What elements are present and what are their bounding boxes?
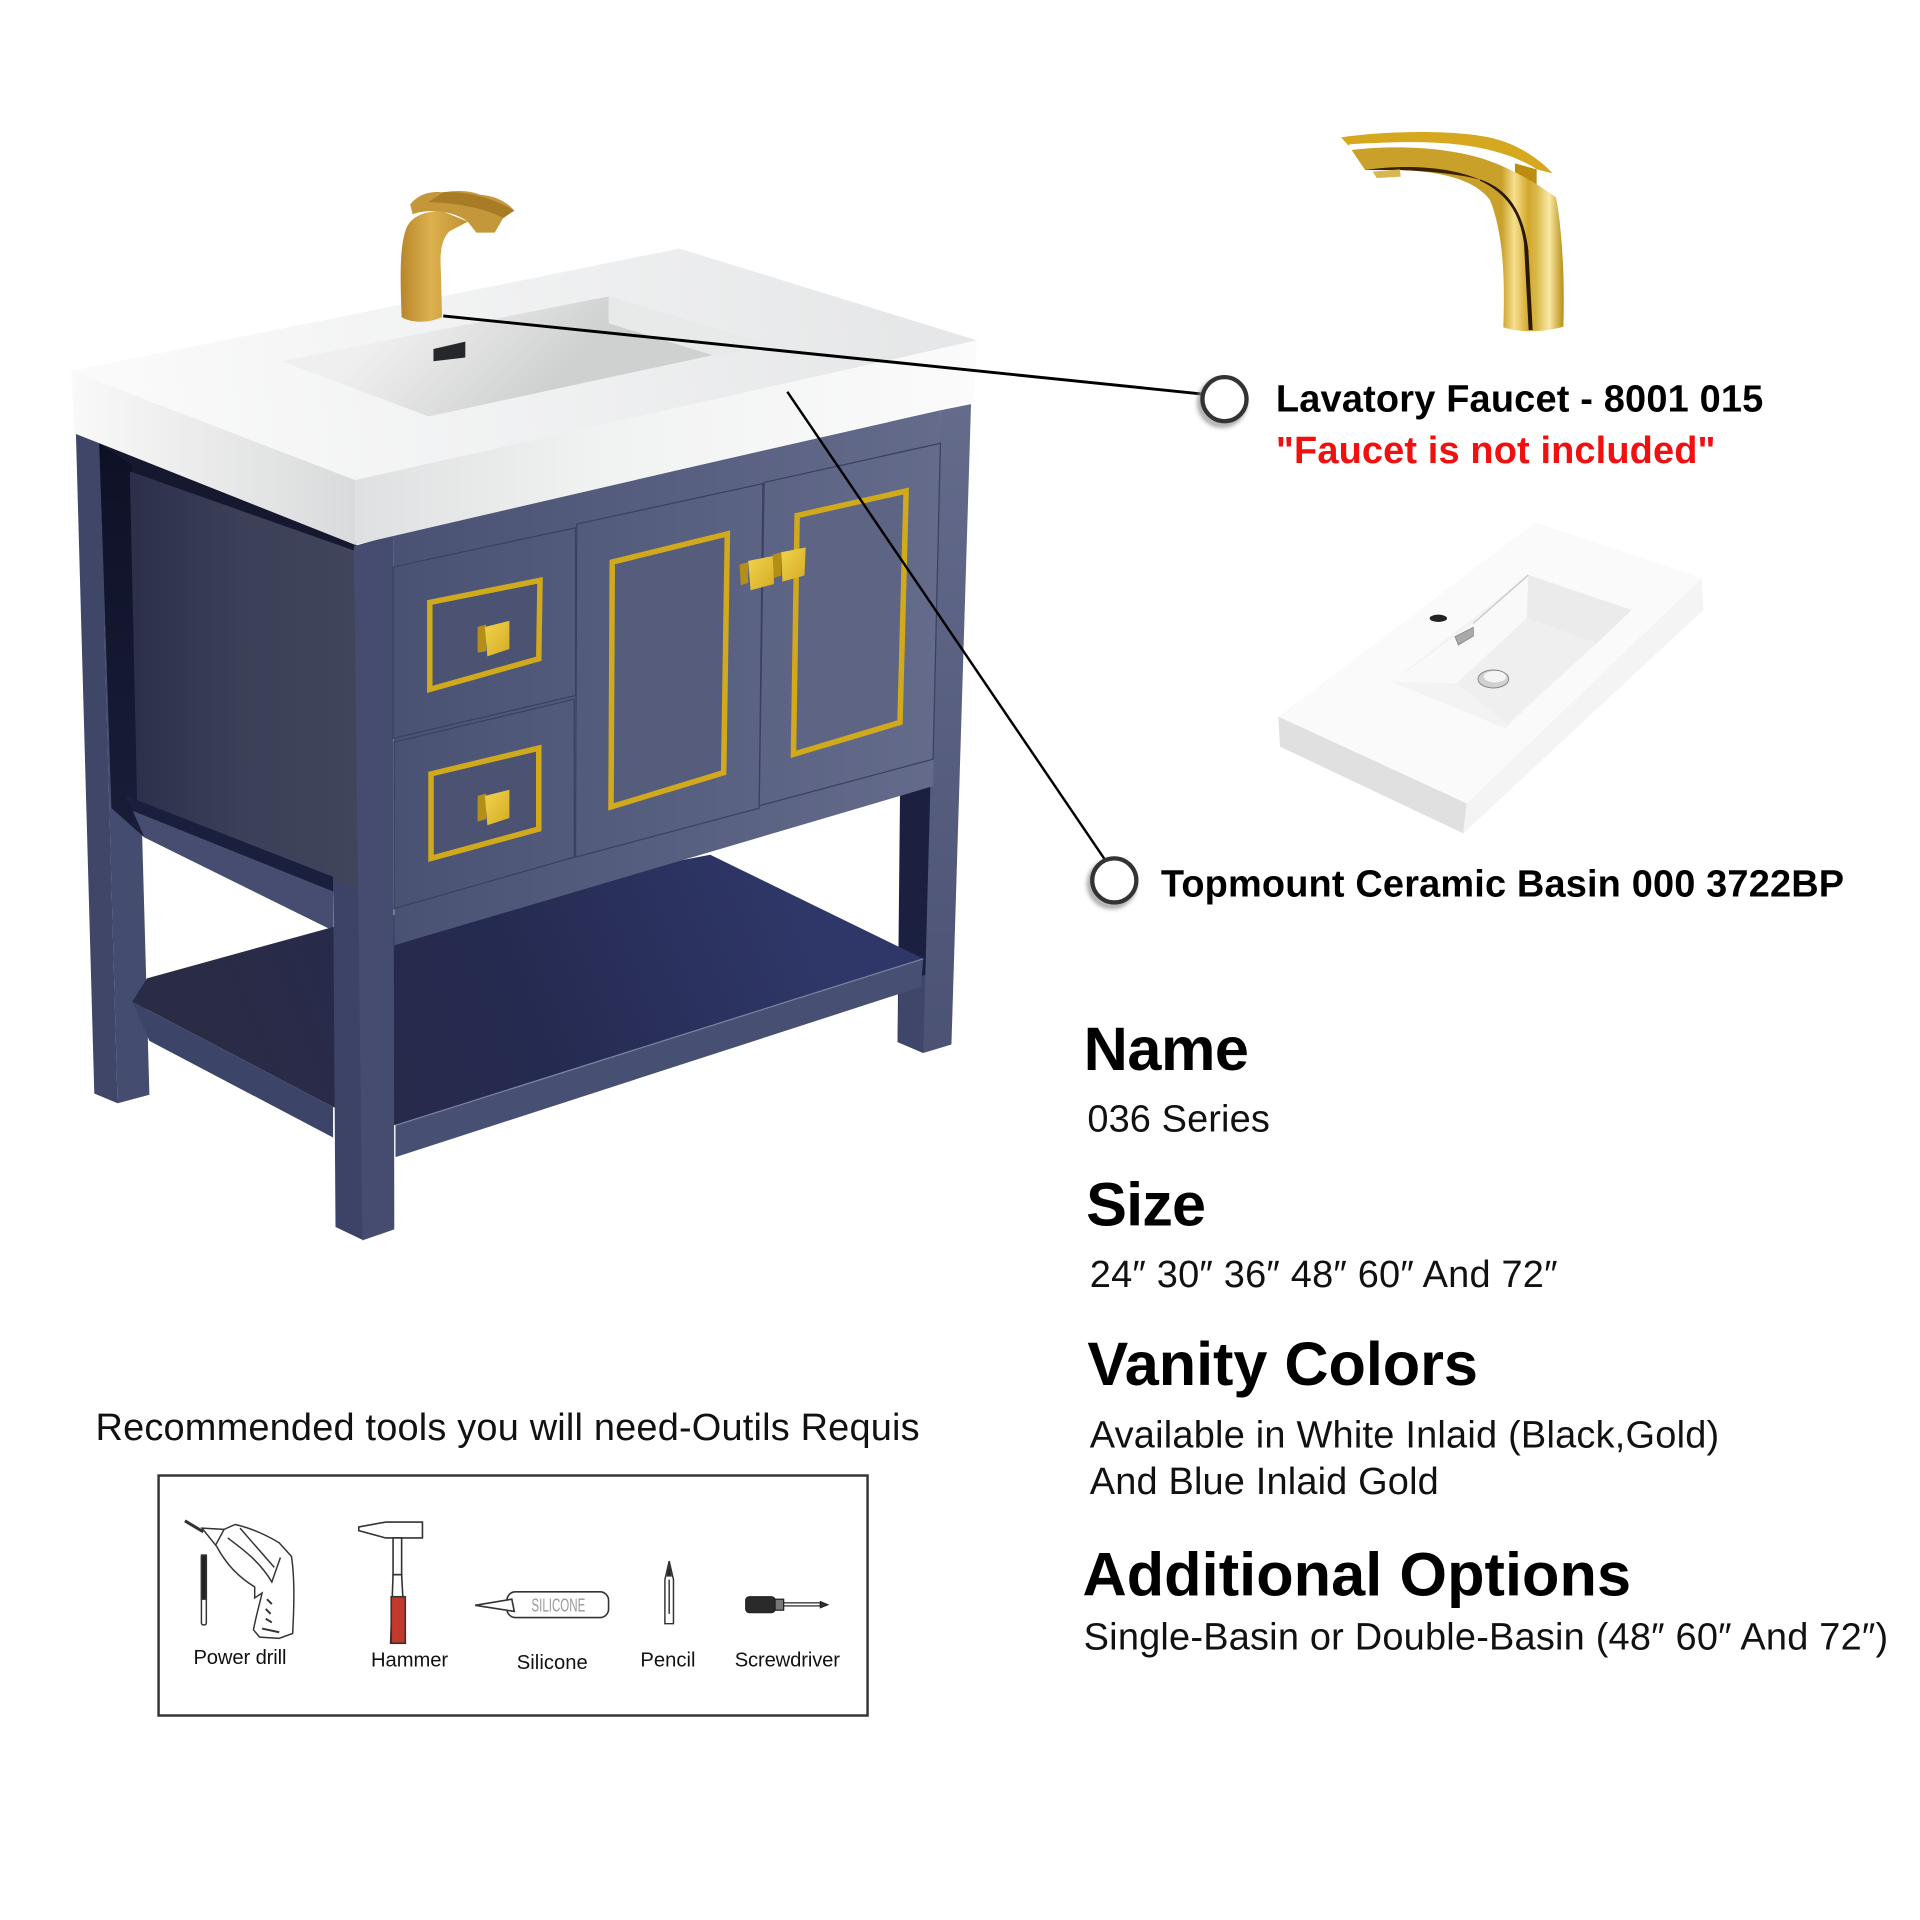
- spec heading: size: Size: [1086, 1171, 1206, 1239]
- spec value: vanity colors: [1090, 1414, 1719, 1503]
- spec value: vanity colors: And Blue Inlaid Gold: [1090, 1461, 1439, 1503]
- spec heading: additional options: Additional Options: [1082, 1541, 1631, 1609]
- leader line: faucet: [443, 316, 1205, 394]
- tools panel: [159, 1476, 868, 1716]
- callout marker: faucet: [1200, 377, 1247, 425]
- tool label: hammer: Hammer: [371, 1650, 448, 1672]
- tool: silicone tube: [475, 1592, 609, 1618]
- front left post: [333, 535, 394, 1240]
- tool: hammer: [359, 1522, 422, 1643]
- tool: pencil: [665, 1561, 673, 1624]
- right door: [759, 443, 940, 806]
- gold faucet on vanity: [401, 191, 514, 322]
- tool: screwdriver: [746, 1597, 828, 1613]
- drain: [1478, 670, 1509, 688]
- countertop: [71, 249, 977, 545]
- back left leg: [76, 433, 149, 1103]
- callout note: faucet not included: "Faucet is not included": [1276, 430, 1716, 472]
- front frame: [393, 410, 940, 945]
- basin bowl: [1392, 575, 1632, 728]
- tool label: power drill: Power drill: [193, 1647, 287, 1669]
- lower shelf: [132, 855, 923, 1157]
- vanity product illustration: [71, 191, 977, 1240]
- callout text: faucet: Lavatory Faucet - 8001 015: [1276, 378, 1763, 420]
- door handles: [740, 547, 806, 590]
- tool label: silicone: Silicone: [517, 1652, 588, 1674]
- faucet product photo: [1341, 132, 1564, 331]
- side panel: [130, 471, 362, 906]
- callout marker: basin: [1090, 858, 1136, 906]
- leader line: basin: [787, 392, 1106, 861]
- tool label: pencil: Pencil: [640, 1650, 696, 1672]
- spec value: additional options: Single-Basin or Double-Basin (48″ 60″ And 72″): [1084, 1616, 1888, 1658]
- side rail: [126, 796, 333, 931]
- basin product photo: [1278, 523, 1703, 833]
- spec value: name: 036 Series: [1087, 1098, 1270, 1140]
- spec value: vanity colors: Available in White Inlaid (Black,Gold): [1090, 1414, 1719, 1456]
- top drawer: [393, 528, 576, 738]
- spec heading: name: Name: [1084, 1015, 1249, 1083]
- tool: power drill: [185, 1521, 294, 1638]
- callout text: basin: Topmount Ceramic Basin 000 3722BP: [1161, 863, 1844, 905]
- left door: [576, 484, 763, 857]
- rear side backing: [76, 431, 356, 896]
- spec value: size: 24″ 30″ 36″ 48″ 60″ And 72″: [1090, 1254, 1558, 1296]
- faucet hole: [1430, 615, 1447, 622]
- sink basin: [282, 296, 764, 416]
- bottom drawer: [394, 699, 574, 909]
- tools heading: Recommended tools you will need-Outils Requis: [96, 1407, 920, 1449]
- tool label: screwdriver: Screwdriver: [735, 1650, 840, 1672]
- overflow slot: [433, 342, 465, 361]
- back right leg and post: [898, 404, 971, 1053]
- tool: silicone tube: SILICONE: [531, 1594, 585, 1615]
- spec heading: vanity colors: Vanity Colors: [1087, 1330, 1478, 1398]
- overflow: [1455, 627, 1473, 645]
